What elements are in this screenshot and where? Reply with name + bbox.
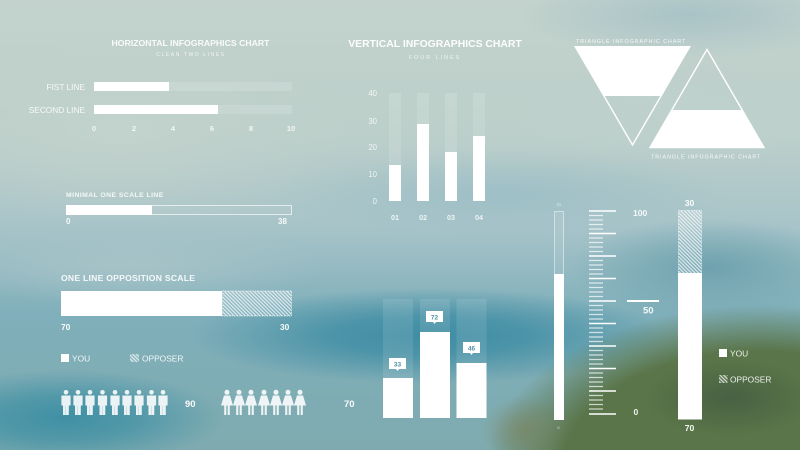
- y axis labels: 10: [368, 170, 378, 179]
- label 30: 30: [685, 198, 694, 208]
- scale labels: [66, 217, 287, 226]
- legend: opposer: OPPOSER: [730, 374, 771, 384]
- scale label 100: 100: [633, 208, 648, 218]
- x axis labels: 01: [391, 213, 399, 222]
- bar: second line: [94, 105, 218, 114]
- scale labels: [61, 322, 290, 332]
- heading: horizontal chart: HORIZONTAL INFOGRAPHICS CHART: [112, 38, 270, 48]
- bar: you: [61, 291, 222, 316]
- legend: you: YOU: [72, 354, 90, 364]
- legend: you: [719, 348, 748, 358]
- heading: vertical chart: VERTICAL INFOGRAPHICS CHART: [348, 39, 522, 50]
- scale labels: 0: [66, 217, 71, 226]
- bars: [389, 124, 485, 201]
- panel: one line opposition scale: [61, 273, 292, 364]
- pictogram: men: [61, 390, 168, 415]
- legend: opposer: OPPOSER: [142, 354, 183, 364]
- panel: vertical opposition bar: [678, 198, 771, 433]
- bars: [383, 332, 486, 418]
- y axis labels: [368, 89, 378, 206]
- callout: 72: 72: [431, 314, 438, 322]
- panel: horizontal infographics chart: [29, 38, 295, 133]
- pictogram: women: [221, 390, 306, 415]
- axis labels: 4: [171, 124, 176, 133]
- thermometer fill: [554, 274, 564, 420]
- legend: you: YOU: [730, 348, 748, 358]
- major ticks: [589, 211, 616, 414]
- minor ticks: [589, 216, 603, 409]
- axis labels: 6: [210, 124, 214, 133]
- axis labels: 2: [132, 124, 136, 133]
- scale fill: [66, 205, 152, 215]
- scale label 50: 50: [643, 306, 654, 316]
- thermometer outline: [554, 212, 564, 274]
- count: women 70: 70: [344, 399, 355, 410]
- subheading: clean two lines: CLEAN TWO LINES: [156, 52, 226, 58]
- bar: you: [678, 273, 702, 420]
- bar tracks: [383, 299, 486, 418]
- callout: 46: 46: [468, 346, 475, 352]
- panel: callout bar chart: [383, 299, 486, 418]
- panel: vertical infographics chart: [348, 39, 522, 222]
- x axis labels: 03: [447, 213, 455, 222]
- y axis labels: 30: [368, 117, 378, 126]
- legend: you: [61, 354, 90, 364]
- heading: opposition scale: ONE LINE OPPOSITION SCALE: [61, 273, 195, 283]
- thermometer top label: 70: [556, 202, 561, 207]
- panel: ruler scale: [589, 208, 659, 417]
- row label: second line: SECOND LINE: [29, 105, 85, 115]
- axis labels: 10: [287, 124, 295, 133]
- label 70: 70: [685, 423, 694, 433]
- axis labels: [92, 124, 295, 133]
- panel: minimal one scale line: [66, 192, 292, 226]
- callout: 33: 33: [394, 362, 401, 368]
- x axis labels: 02: [419, 213, 427, 222]
- axis labels: 0: [92, 124, 96, 133]
- thermometer bottom label: 0: [557, 425, 560, 430]
- subheading: four lines: FOUR LINES: [409, 55, 461, 61]
- triangle: upright: [649, 50, 765, 148]
- triangle: inverted: [574, 46, 691, 145]
- bar: opposer hatch: [678, 210, 702, 274]
- y axis labels: 20: [368, 143, 378, 152]
- heading: minimal scale: MINIMAL ONE SCALE LINE: [66, 192, 164, 199]
- y axis labels: 40: [368, 89, 378, 98]
- scale labels: 70: [61, 322, 71, 332]
- row label: first line: FIST LINE: [46, 82, 85, 92]
- x axis labels: 04: [475, 213, 483, 222]
- label: bottom triangle: TRIANGLE INFOGRAPHIC CHART: [651, 154, 761, 160]
- scale labels: 38: [278, 217, 287, 226]
- axis labels: 8: [249, 124, 253, 133]
- scale labels: 30: [280, 322, 290, 332]
- bar tracks: [389, 93, 485, 201]
- panel: triangle charts: [574, 39, 765, 160]
- panel: thermometer bar: [554, 202, 564, 430]
- x axis labels: [391, 213, 483, 222]
- bar track: first line: [94, 82, 292, 91]
- bar: opposer hatch: [222, 291, 292, 316]
- scale outline: [66, 206, 292, 214]
- bar: first line: [94, 82, 169, 91]
- scale label 0: 0: [634, 407, 638, 417]
- count: men 90: 90: [185, 399, 196, 410]
- y axis labels: 0: [373, 197, 378, 206]
- label: top triangle: TRIANGLE INFOGRAPHIC CHART: [576, 39, 686, 45]
- midpoint marker: [627, 300, 659, 302]
- bar track: second line: [94, 105, 292, 114]
